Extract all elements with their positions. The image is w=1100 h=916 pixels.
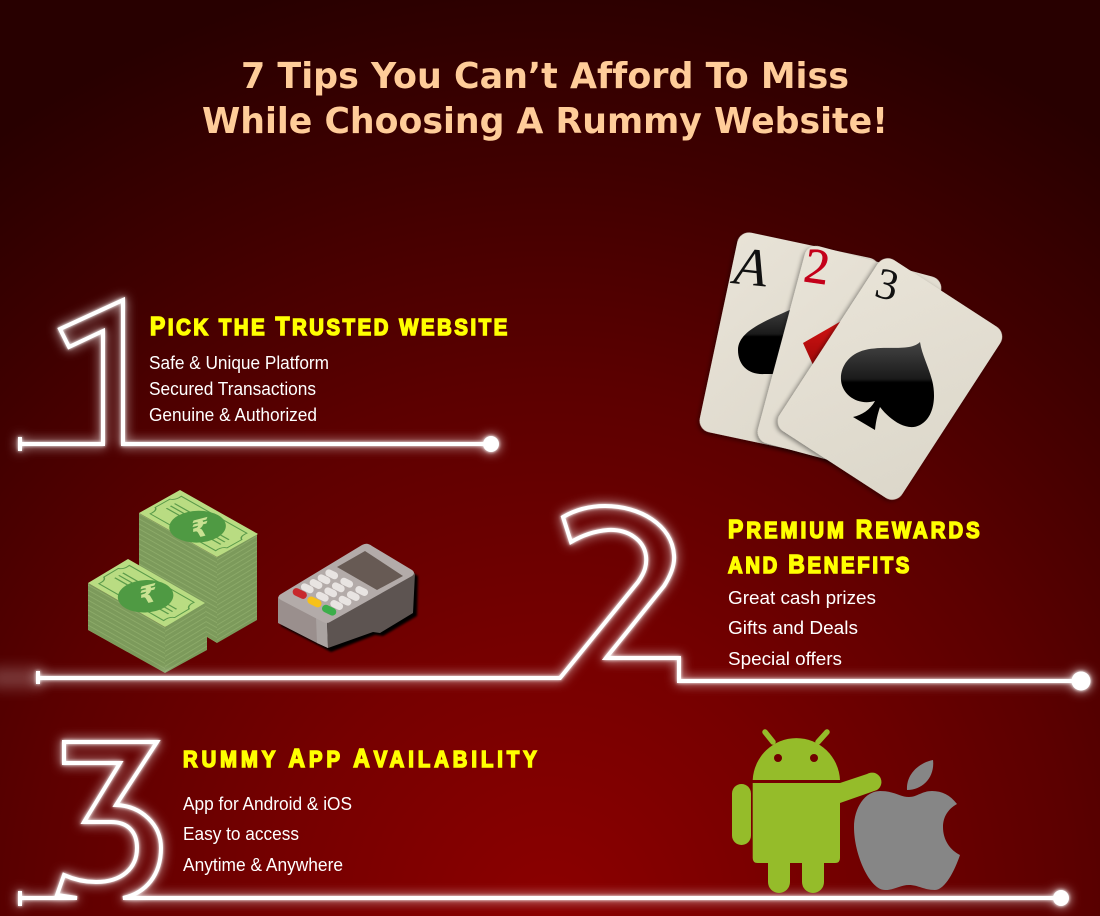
list: tip 2 points bbox=[728, 588, 876, 669]
list: tip 2 points: Special offers bbox=[728, 649, 842, 669]
heading: rummy app availability: RUMMY APP AVAILABILITY bbox=[183, 745, 537, 773]
heading: premium rewards and benefits: AND BENEFITS bbox=[728, 551, 909, 579]
icon: stacks of rupee notes: ₹ bbox=[191, 511, 209, 545]
icon: playing cards A 2 3: 2 bbox=[801, 237, 833, 295]
title: While Choosing A Rummy Website! bbox=[202, 101, 888, 142]
list: tip 1 points bbox=[149, 353, 329, 425]
heading: premium rewards and benefits bbox=[728, 516, 980, 579]
icon: apple logo bbox=[854, 760, 960, 890]
icon: android robot bbox=[732, 732, 881, 893]
list: tip 3 points: App for Android & iOS bbox=[183, 794, 352, 814]
list: tip 1 points: Safe & Unique Platform bbox=[149, 353, 329, 373]
icon: stacks of rupee notes: ₹ bbox=[139, 577, 157, 611]
panel: tip 3 app availability bbox=[20, 742, 1069, 906]
list: tip 2 points: Great cash prizes bbox=[728, 588, 876, 608]
list: tip 3 points bbox=[183, 794, 352, 875]
icon: stacks of rupee notes bbox=[85, 490, 258, 673]
list: tip 2 points: Gifts and Deals bbox=[728, 618, 858, 638]
panel: tip 2 rewards bbox=[0, 506, 1090, 690]
neon number 1 with line bbox=[20, 300, 499, 452]
neon number 2 with line bbox=[38, 506, 1090, 690]
line glow tail at left bbox=[0, 668, 42, 688]
title bbox=[202, 56, 888, 142]
title: 7 Tips You Can’t Afford To Miss bbox=[241, 56, 849, 97]
heading: pick the trusted website: PICK THE TRUSTED WEBSITE bbox=[150, 313, 507, 341]
icon: playing cards A 2 3: A bbox=[728, 235, 772, 299]
list: tip 1 points: Genuine & Authorized bbox=[149, 405, 317, 425]
list: tip 1 points: Secured Transactions bbox=[149, 379, 316, 399]
icon: playing cards A 2 3 bbox=[697, 230, 1007, 504]
list: tip 3 points: Anytime & Anywhere bbox=[183, 855, 343, 875]
list: tip 3 points: Easy to access bbox=[183, 824, 299, 844]
icon: card payment terminal bbox=[278, 544, 418, 652]
icon: playing cards A 2 3: 3 bbox=[871, 258, 904, 311]
heading: premium rewards and benefits: PREMIUM REWARDS bbox=[728, 516, 980, 544]
panel: tip 1 trusted website bbox=[20, 300, 507, 452]
neon number 3 with line bbox=[20, 742, 1069, 906]
